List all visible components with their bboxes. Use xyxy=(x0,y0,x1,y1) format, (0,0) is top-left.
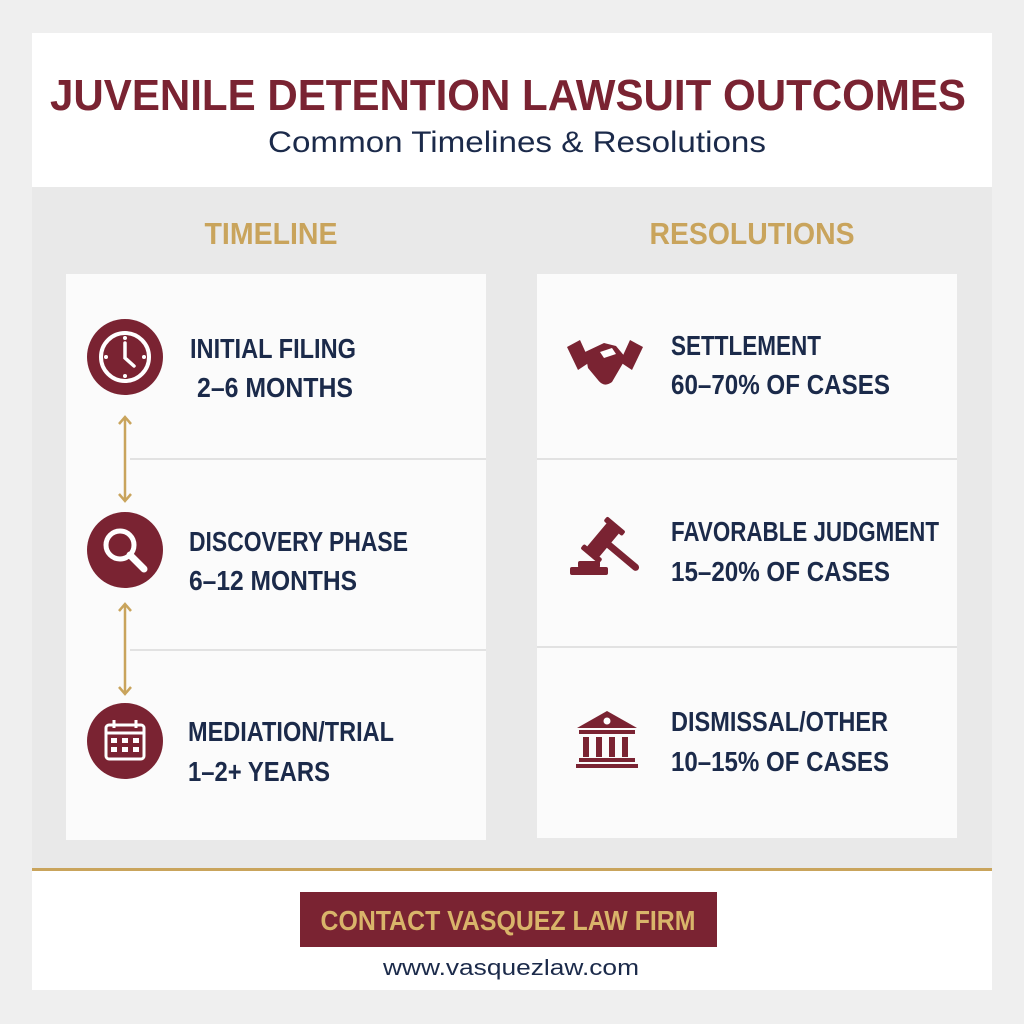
text: settlement: SETTLEMENT xyxy=(671,330,821,361)
text: mediation xyxy=(188,716,394,787)
text: settlement: 60–70% OF CASES xyxy=(671,369,890,400)
title: JUVENILE DETENTION LAWSUIT OUTCOMES xyxy=(50,71,966,120)
url: www.vasquezlaw.com xyxy=(382,955,639,980)
text: initial filing: 2–6 MONTHS xyxy=(197,372,353,403)
text: initial filing: INITIAL FILING xyxy=(190,333,356,364)
icon: handshake xyxy=(567,340,643,385)
text: discovery: 6–12 MONTHS xyxy=(189,565,357,596)
text: favorable judgment: FAVORABLE JUDGMENT xyxy=(671,516,939,547)
icon: gavel xyxy=(570,516,652,586)
text: favorable judgment xyxy=(671,516,939,587)
icon: magnifier xyxy=(87,512,163,588)
text: mediation: 1–2+ YEARS xyxy=(188,756,330,787)
text: dismissal xyxy=(671,706,889,777)
icon: courthouse xyxy=(576,711,638,768)
text: dismissal: 10–15% OF CASES xyxy=(671,746,889,777)
panel: resolutions xyxy=(537,274,957,838)
button: contact: CONTACT VASQUEZ LAW FIRM xyxy=(320,905,696,936)
heading: timeline: TIMELINE xyxy=(204,216,338,251)
heading: resolutions: RESOLUTIONS xyxy=(650,216,854,251)
text: settlement xyxy=(671,330,890,400)
text: discovery: DISCOVERY PHASE xyxy=(189,526,408,557)
arrow xyxy=(119,417,131,501)
text: mediation: MEDIATION/TRIAL xyxy=(188,716,394,747)
arrow xyxy=(119,604,131,694)
button: contact xyxy=(300,892,717,947)
text: initial filing xyxy=(190,333,356,403)
text: favorable judgment: 15–20% OF CASES xyxy=(671,556,890,587)
subtitle: Common Timelines & Resolutions xyxy=(268,126,766,159)
text: discovery xyxy=(189,526,408,596)
icon: clock xyxy=(87,319,163,395)
icon: calendar xyxy=(87,703,163,779)
text: dismissal: DISMISSAL/OTHER xyxy=(671,706,888,737)
panel: timeline xyxy=(66,274,486,840)
